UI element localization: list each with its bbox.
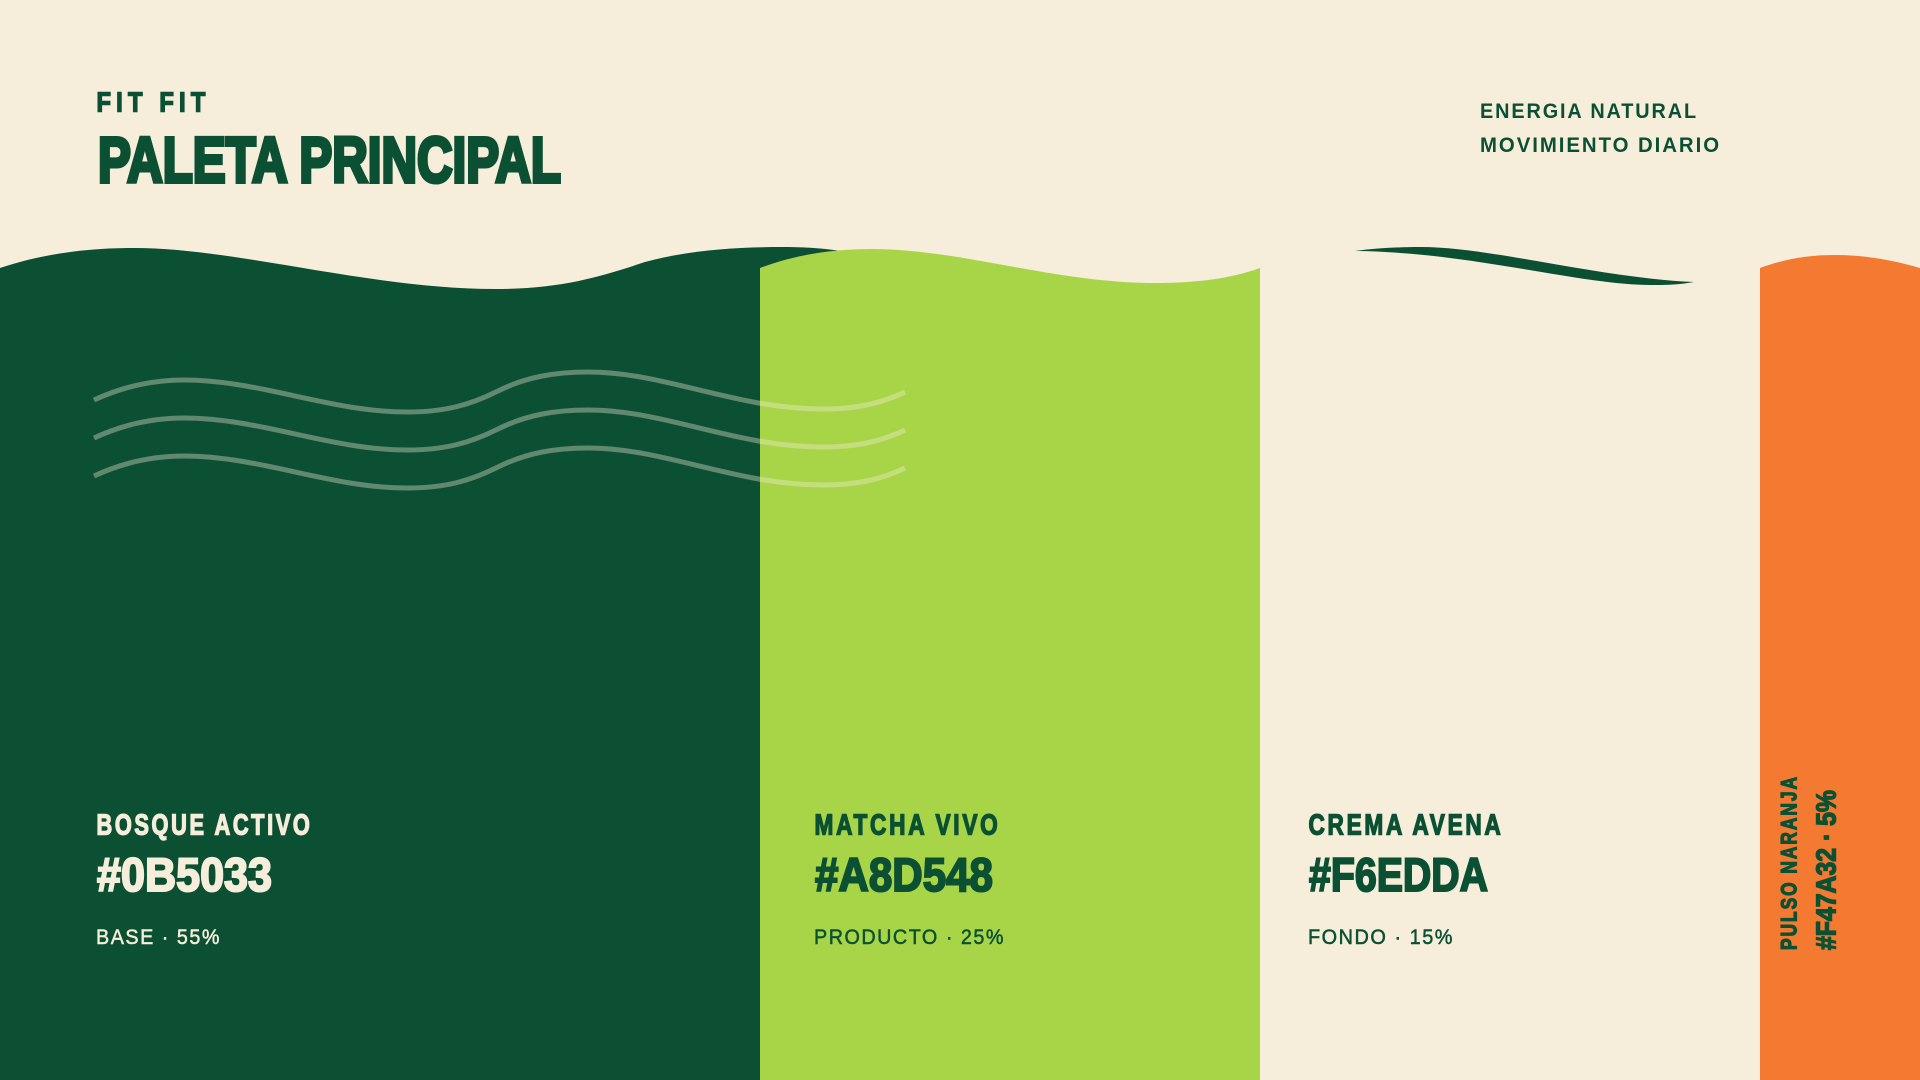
swatch text: bosque activo: #0B5033 [97, 848, 272, 901]
swatch text: crema avena: CREMA AVENA [1308, 810, 1504, 842]
decorative wave lines [94, 372, 905, 488]
brand label: FIT FIT [96, 86, 210, 118]
tagline [1480, 100, 1721, 157]
swatch text: pulso naranja: PULSO NARANJA [1776, 775, 1802, 950]
swatch text: pulso naranja [1776, 775, 1842, 950]
swatch text: crema avena: #F6EDDA [1309, 848, 1488, 901]
swatch text: matcha vivo: PRODUCTO · 25% [814, 926, 1005, 949]
swatch text: crema avena: FONDO · 15% [1308, 926, 1454, 949]
swatch text: bosque activo [96, 810, 312, 949]
swatch text: bosque activo: BASE · 55% [96, 926, 221, 949]
swatch text: crema avena [1308, 810, 1504, 949]
swatch text: matcha vivo: MATCHA VIVO [814, 810, 1000, 842]
panel: matcha vivo [760, 249, 1260, 1080]
tagline: MOVIMIENTO DIARIO [1480, 134, 1721, 157]
swatch text: matcha vivo [814, 810, 1005, 949]
swatch text: matcha vivo: #A8D548 [815, 848, 993, 901]
accent: dark wave sliver [1355, 247, 1694, 285]
panel: pulso naranja [1760, 255, 1920, 1080]
panel: bosque activo [0, 247, 870, 1080]
title: PALETA PRINCIPAL [98, 124, 561, 196]
swatch text: pulso naranja: #F47A32 · 5% [1810, 790, 1842, 950]
swatch text: bosque activo: BOSQUE ACTIVO [96, 810, 312, 842]
tagline: ENERGIA NATURAL [1480, 100, 1698, 123]
